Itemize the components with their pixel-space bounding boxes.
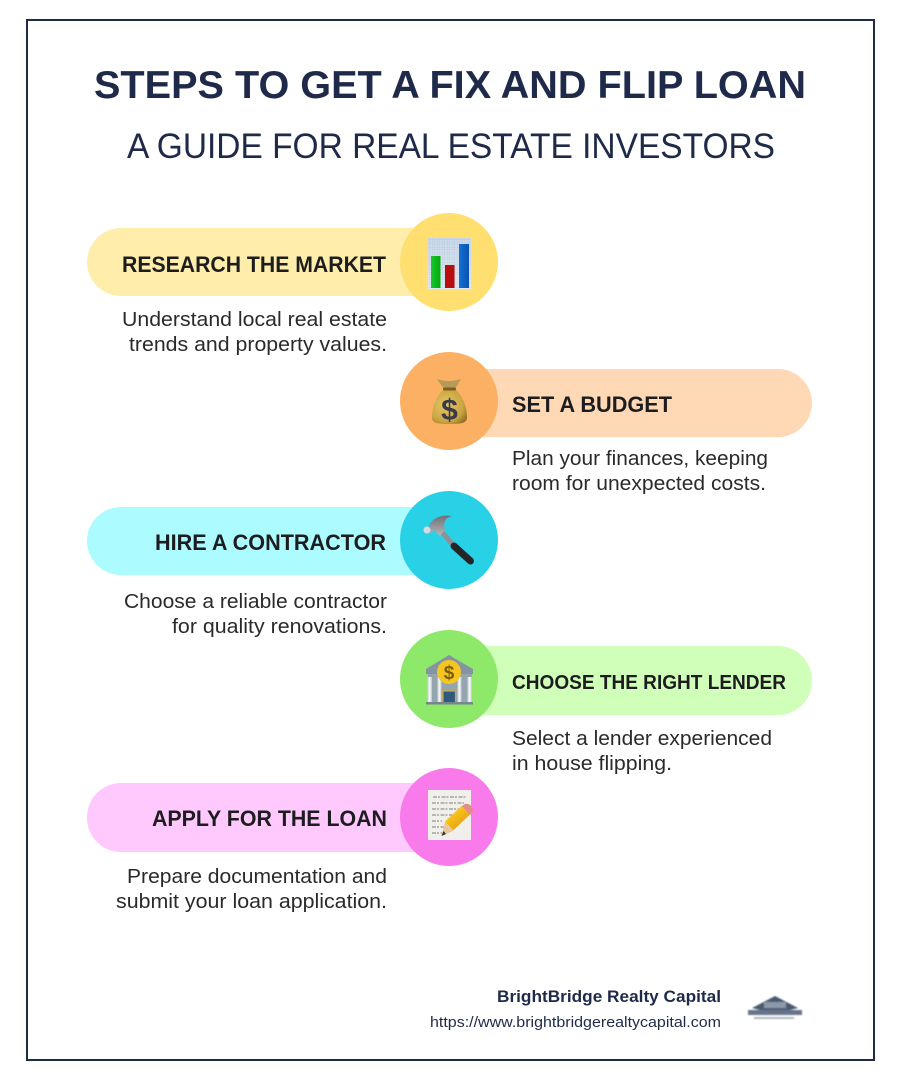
pill: choose the right lender bbox=[452, 646, 812, 715]
heading: apply for the loan: APPLY FOR THE LOAN bbox=[152, 806, 387, 831]
icon: memo and pencil bbox=[428, 790, 473, 840]
step 5: apply for the loan bbox=[87, 768, 498, 913]
icon: hammer bbox=[424, 515, 470, 561]
description: apply: Prepare documentation and bbox=[127, 866, 387, 888]
icon: bar chart bbox=[428, 238, 471, 289]
circle: lender bbox=[400, 630, 498, 728]
step 4: choose the right lender bbox=[400, 630, 812, 775]
icon: money bag: $ bbox=[441, 394, 458, 427]
pill: apply for the loan bbox=[87, 783, 447, 852]
pill: research the market bbox=[87, 228, 447, 296]
description: contractor bbox=[124, 591, 387, 638]
description: apply bbox=[116, 866, 387, 913]
description: lender bbox=[512, 728, 772, 775]
heading: research the market: RESEARCH THE MARKET bbox=[122, 252, 387, 277]
footer: website: https://www.brightbridgerealtycapital.com bbox=[430, 1014, 721, 1031]
description: research bbox=[122, 309, 387, 356]
circle: contractor bbox=[400, 491, 498, 589]
pill: hire a contractor bbox=[87, 507, 447, 575]
description: lender: Select a lender experienced bbox=[512, 728, 772, 750]
description: budget: Plan your finances, keeping bbox=[512, 448, 768, 470]
footer: company name: BrightBridge Realty Capital bbox=[497, 987, 721, 1006]
icon: money bag bbox=[432, 379, 467, 427]
circle: budget bbox=[400, 352, 498, 450]
description: research: Understand local real estate bbox=[122, 309, 387, 331]
icon: bank: $ bbox=[444, 663, 455, 684]
description: apply: submit your loan application. bbox=[116, 891, 387, 913]
heading: hire a contractor: HIRE A CONTRACTOR bbox=[155, 530, 386, 555]
description: budget: room for unexpected costs. bbox=[512, 473, 766, 495]
logo: brightbridge bbox=[748, 996, 802, 1019]
title: STEPS TO GET A FIX AND FLIP LOAN bbox=[94, 64, 806, 107]
subtitle: A GUIDE FOR REAL ESTATE INVESTORS bbox=[127, 127, 775, 166]
circle: apply bbox=[400, 768, 498, 866]
pill: set a budget bbox=[452, 369, 812, 437]
icon: bank bbox=[426, 655, 473, 704]
description: contractor: for quality renovations. bbox=[172, 616, 387, 638]
description: contractor: Choose a reliable contractor bbox=[124, 591, 387, 613]
description: lender: in house flipping. bbox=[512, 753, 672, 775]
heading: choose the right lender: CHOOSE THE RIGHT LENDER bbox=[512, 672, 787, 694]
heading: set a budget: SET A BUDGET bbox=[512, 392, 673, 417]
step 1: research the market bbox=[87, 213, 498, 356]
step 3: hire a contractor bbox=[87, 491, 498, 638]
description: research: trends and property values. bbox=[129, 334, 387, 356]
step 2: set a budget bbox=[400, 352, 812, 495]
description: budget bbox=[512, 448, 768, 495]
circle: research bbox=[400, 213, 498, 311]
